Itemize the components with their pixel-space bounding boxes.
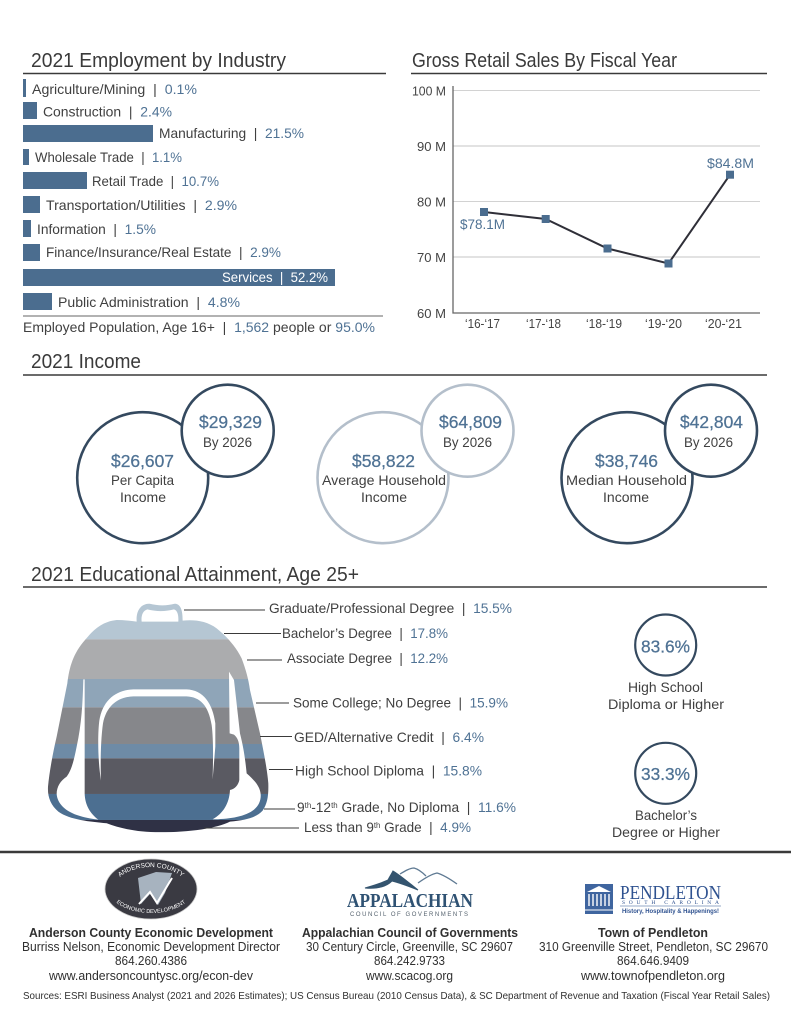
logo: Appalachian Council of Governments: COUNCIL OF GOVERNMENTS [350, 912, 468, 918]
bar: agriculture/mining: Agriculture/Mining | 0.1% [32, 81, 197, 97]
heading: employment: 2021 Employment by Industry [31, 50, 286, 72]
bar: wholesale trade: Wholesale Trade | 1.1% [35, 149, 182, 165]
circles: per capita income: $29,329 [199, 412, 262, 432]
y axis labels [412, 84, 446, 321]
contact: Anderson County: Burriss Nelson, Economic Development Director [22, 940, 280, 954]
circles: per capita income: Per Capita [111, 472, 174, 488]
x axis labels: ‘18-‘19 [586, 316, 622, 331]
circles: per capita income [77, 385, 274, 543]
logo: Town of Pendleton: SOUTH CAROLINA [622, 900, 719, 906]
y axis labels: 80 M [417, 194, 446, 210]
circles: median household income: Income [603, 489, 649, 505]
contact: Town of Pendleton: www.townofpendleton.org [580, 969, 725, 983]
logo: Town of Pendleton: History, Hospitality & Happenings! [622, 908, 719, 915]
panel: income [23, 351, 767, 543]
bar: services [23, 269, 335, 286]
contact: Appalachian Council of Governments: 864.242.9733 [374, 954, 445, 968]
x axis labels: ‘16-‘17 [465, 316, 500, 331]
stat: high school or higher: Diploma or Higher [608, 696, 724, 712]
bar: information: Information | 1.5% [37, 221, 156, 237]
stat: high school or higher [608, 614, 724, 712]
y axis labels: 90 M [417, 139, 446, 154]
bar: finance/insurance/real estate: Finance/Insurance/Real Estate | 2.9% [46, 244, 281, 260]
label: associate degree: Associate Degree | 12.2% [287, 650, 448, 666]
stat: bachelor's or higher: Bachelor’s [635, 807, 697, 823]
contact: Town of Pendleton: 310 Greenville Street, Pendleton, SC 29670 [539, 940, 768, 954]
logo: Anderson County Economic Development: ANDERSON COUNTY [118, 862, 185, 877]
employed population note: Employed Population, Age 16+ | 1,562 people or 95.0% [23, 319, 375, 335]
circles: average household income: Average Household [322, 472, 446, 488]
circles: per capita income: Income [120, 489, 166, 505]
logo: Town of Pendleton [585, 882, 721, 915]
x axis labels [465, 316, 742, 331]
contact: Appalachian Council of Governments [302, 926, 518, 983]
contact: Town of Pendleton [539, 926, 768, 983]
contact: Appalachian Council of Governments: www.scacog.org [365, 969, 453, 983]
line chart series [480, 171, 734, 268]
circles: median household income: $38,746 [595, 451, 658, 471]
circles: median household income [562, 385, 757, 543]
x axis labels: ‘20-‘21 [705, 316, 742, 331]
y axis labels: 60 M [417, 306, 446, 321]
x axis labels: ‘19-‘20 [645, 316, 682, 331]
bar: public administration: Public Administration | 4.8% [58, 294, 240, 310]
circles: median household income: $42,804 [680, 412, 743, 432]
bar: transportation/utilities: Transportation/Utilities | 2.9% [46, 197, 237, 213]
label: 9th-12th grade: 11.6% [478, 799, 516, 815]
stat: bachelor's or higher [612, 743, 720, 840]
logo: Town of Pendleton: PENDLETON [620, 882, 721, 904]
circles: per capita income: $26,607 [111, 451, 174, 471]
logo: Anderson County Economic Development [104, 858, 198, 920]
label: less than 9th grade: th [374, 821, 380, 830]
panel: educational attainment [23, 564, 767, 840]
x axis labels: ‘17-‘18 [526, 316, 561, 331]
heading: retail sales: Gross Retail Sales By Fiscal Year [412, 50, 677, 72]
contact: Town of Pendleton: 864.646.9409 [617, 954, 689, 968]
contact: Town of Pendleton: Town of Pendleton [598, 926, 708, 940]
circles: per capita income: By 2026 [203, 434, 252, 450]
icon: backpack chart [48, 604, 268, 832]
logo: Appalachian Council of Governments: APPALACHIAN [347, 890, 473, 912]
y axis labels: 100 M [412, 84, 446, 98]
bar: retail trade: Retail Trade | 10.7% [92, 173, 219, 189]
label: less than 9th grade: 4.9% [440, 819, 471, 835]
value label 2020-21: $84.8M [707, 155, 754, 171]
label: less than 9th grade: Less than 9 [304, 819, 376, 835]
circles: average household income: By 2026 [443, 434, 492, 450]
stat: bachelor's or higher: 33.3% [641, 764, 690, 784]
stat: high school or higher: 83.6% [641, 636, 690, 656]
logo: Anderson County Economic Development: ECONOMIC DEVELOPMENT [116, 900, 184, 913]
contact: Anderson County [22, 926, 280, 983]
label: 9th-12th grade: 9 [297, 799, 305, 815]
heading: education: 2021 Educational Attainment, Age 25+ [31, 564, 359, 586]
circles: average household income [318, 385, 514, 543]
contact: Anderson County: 864.260.4386 [115, 954, 187, 968]
circles: average household income: Income [361, 489, 407, 505]
circles: average household income: $58,822 [352, 451, 415, 471]
label: less than 9th grade: Grade | [380, 819, 440, 835]
y axis labels: 70 M [417, 250, 446, 265]
label: 9th-12th grade: th [331, 801, 338, 810]
stat: bachelor's or higher: Degree or Higher [612, 824, 720, 840]
label: graduate degree: Graduate/Professional Degree | 15.5% [269, 600, 512, 616]
label: GED: GED/Alternative Credit | 6.4% [294, 729, 484, 745]
circles: median household income: By 2026 [684, 434, 733, 450]
contact: Appalachian Council of Governments: Appalachian Council of Governments [302, 926, 518, 940]
panel: gross retail sales [411, 50, 767, 331]
bar: services: Services | 52.2% [222, 269, 328, 285]
circles: average household income: $64,809 [439, 412, 502, 432]
panel: employment by industry [23, 50, 386, 335]
value label 2016-17: $78.1M [460, 216, 505, 232]
heading: income: 2021 Income [31, 351, 141, 373]
logo: Appalachian Council of Governments [347, 868, 473, 918]
bar: retail trade [23, 172, 219, 189]
leader lines [184, 610, 299, 828]
contact: Anderson County: Anderson County Economic Development [29, 926, 274, 940]
stat: high school or higher: High School [628, 679, 703, 695]
label: bachelor's degree: Bachelor’s Degree | 17.8% [282, 625, 448, 641]
bar: construction: Construction | 2.4% [43, 104, 172, 120]
bar: manufacturing [23, 125, 304, 142]
label: high school diploma: High School Diploma | 15.8% [295, 762, 482, 778]
contact: Appalachian Council of Governments: 30 Century Circle, Greenville, SC 29607 [306, 940, 513, 954]
contact: Anderson County: www.andersoncountysc.org/econ-dev [48, 969, 254, 983]
circles: median household income: Median Household [566, 472, 687, 488]
label: 9th-12th grade: Grade, No Diploma | [338, 799, 478, 815]
bar: manufacturing: Manufacturing | 21.5% [159, 125, 304, 141]
label: 9th-12th grade: -12 [311, 799, 331, 815]
label: 9th-12th grade: th [305, 801, 311, 810]
label: some college: Some College; No Degree | 15.9% [293, 694, 508, 710]
